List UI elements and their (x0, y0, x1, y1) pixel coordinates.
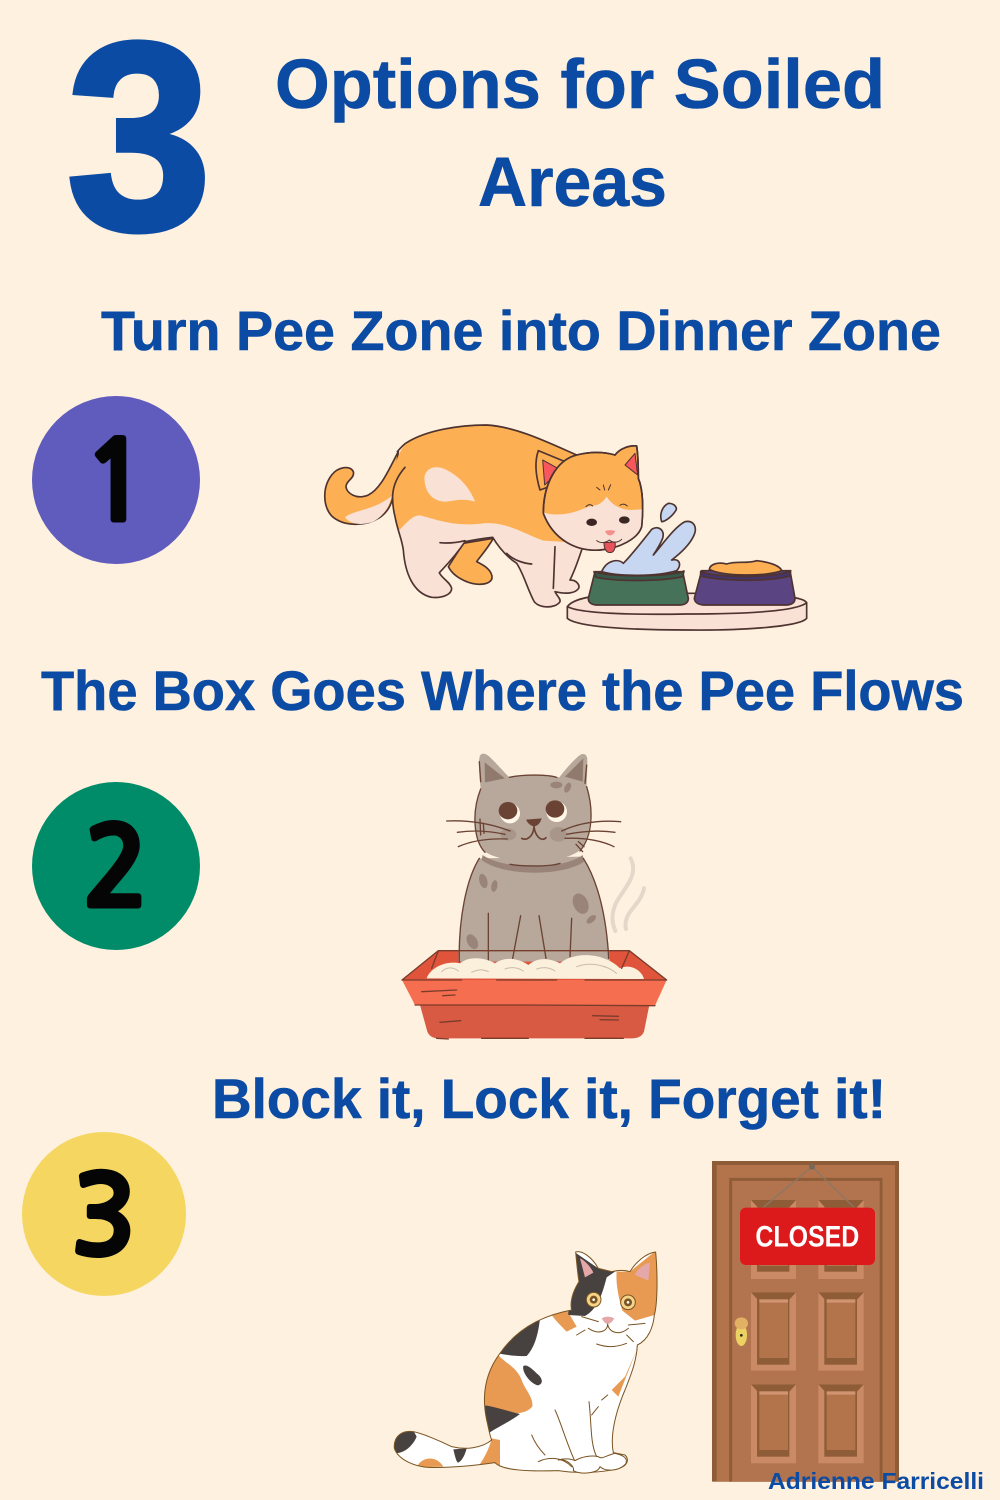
closed sign (740, 1164, 875, 1265)
door knob (735, 1317, 748, 1346)
far hind leg (448, 538, 493, 584)
litter box front (402, 951, 667, 1039)
closed sign: CLOSED (755, 1221, 859, 1254)
heading: option 3: Block it, Lock it, Forget it! (212, 1067, 886, 1130)
illustration: orange cat drinking at bowls (325, 425, 807, 630)
heading: option 2: The Box Goes Where the Pee Flows (41, 659, 964, 722)
cat (447, 754, 621, 962)
illustration: gray cat in litter box (402, 754, 667, 1039)
bowl rims and food (594, 561, 791, 581)
door (712, 1161, 899, 1482)
door panels (751, 1200, 864, 1463)
paws (558, 1453, 626, 1473)
illustration: door with closed sign (712, 1161, 899, 1482)
face (532, 1258, 650, 1467)
heading: option 1: Turn Pee Zone into Dinner Zone (101, 299, 941, 362)
smell waves (612, 858, 644, 931)
water splash (602, 503, 695, 575)
title (275, 45, 885, 221)
cat head (536, 446, 645, 553)
number badge 2: 2 (83, 814, 149, 923)
cat body (390, 425, 587, 610)
number badge 3 (22, 1132, 186, 1296)
green bowl (588, 572, 688, 605)
placemat (567, 593, 807, 630)
purple bowl (694, 571, 795, 605)
litter box back (402, 951, 667, 980)
illustration: calico cat (392, 1247, 660, 1473)
number badge 1: 1 (83, 428, 149, 537)
number badge 3: 3 (71, 1163, 137, 1272)
litter (427, 955, 644, 979)
title: Areas (478, 143, 667, 221)
number badge 1 (32, 396, 200, 564)
cat tail (325, 452, 398, 524)
calico patches (392, 1247, 660, 1467)
author credit: Adrienne Farricelli (768, 1468, 984, 1494)
title: Options for Soiled (275, 45, 885, 123)
cat silhouette (394, 1252, 657, 1472)
number badge 2 (32, 782, 200, 950)
outline (394, 1252, 657, 1472)
